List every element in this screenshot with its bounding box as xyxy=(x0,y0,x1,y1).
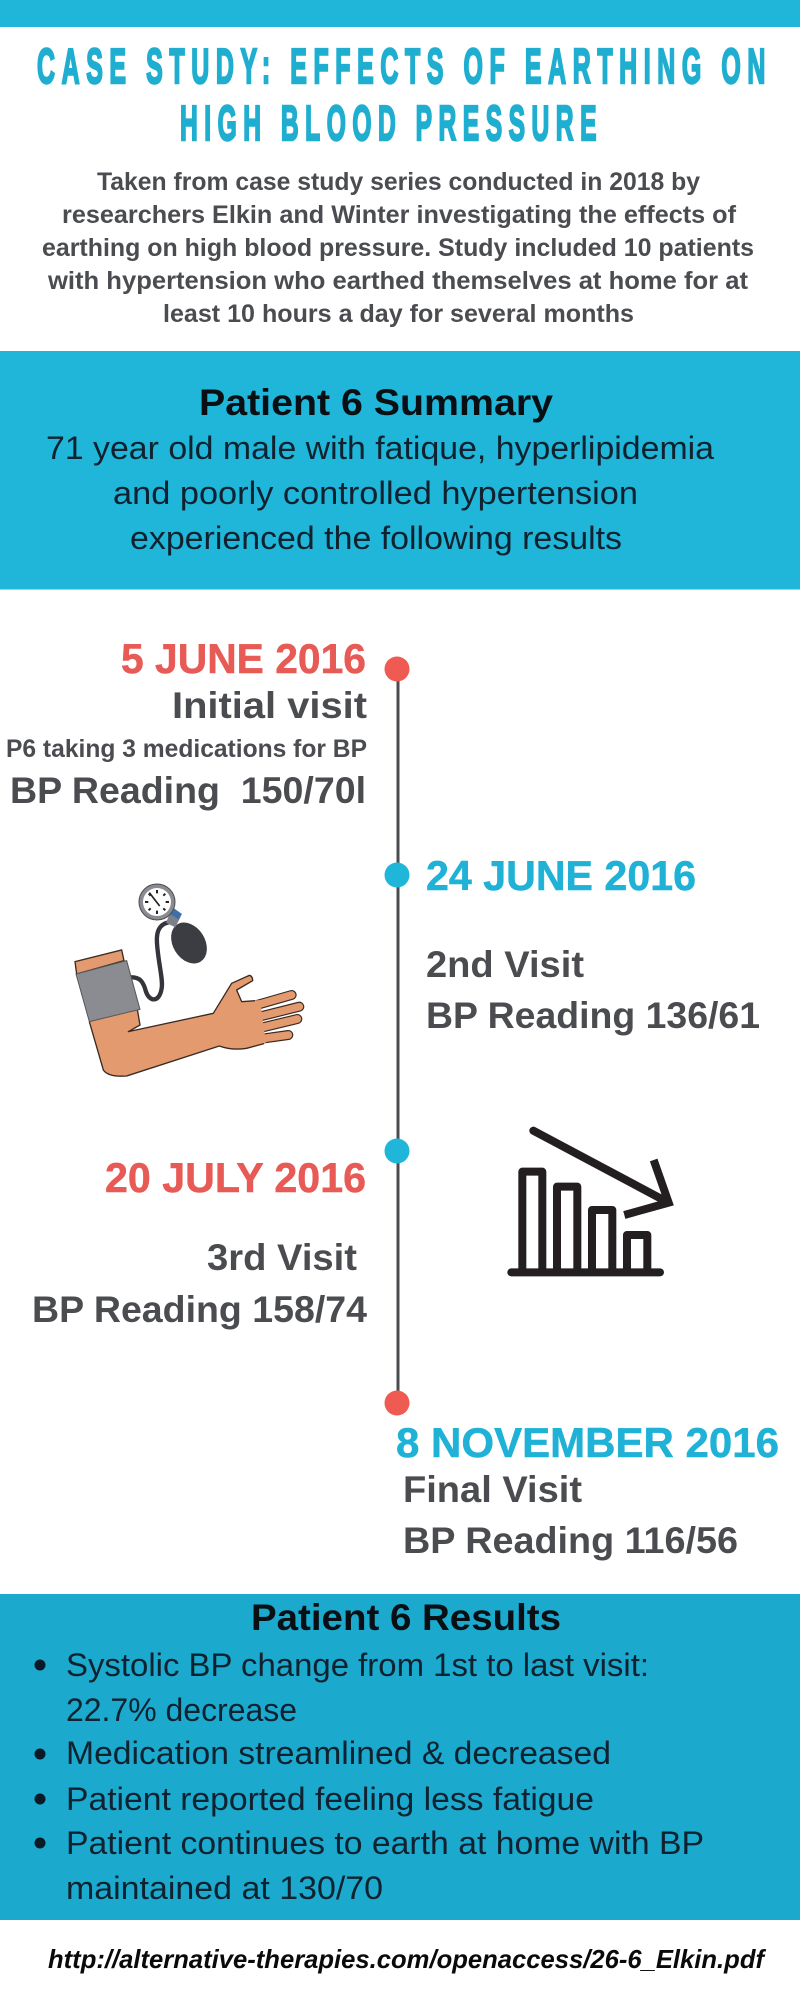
bars xyxy=(522,1172,647,1272)
source link text: http://alternative-therapies.com/openaccess/26-6_Elkin.pdf xyxy=(48,1944,766,1974)
visit: 20 July 2016: 3rd Visit xyxy=(207,1237,357,1278)
heading: patient 6 results: Patient 6 Results xyxy=(251,1597,561,1638)
panel: patient summary xyxy=(0,351,800,590)
results list: Patient continues to earth at home with BP xyxy=(66,1825,704,1861)
bulb xyxy=(164,916,214,970)
visit: 20 July 2016: 20 JULY 2016 xyxy=(105,1154,366,1201)
summary text: experienced the following results xyxy=(130,520,622,556)
summary text: 71 year old male with fatique, hyperlipidemia xyxy=(46,430,714,466)
visit: 5 June 2016: 5 JUNE 2016 xyxy=(121,635,366,682)
results list: Patient reported feeling less fatigue xyxy=(66,1781,594,1817)
visit: 8 November 2016: Final Visit xyxy=(403,1469,582,1510)
visit: 24 June 2016: 24 JUNE 2016 xyxy=(426,852,696,899)
intro text block: earthing on high blood pressure. Study included 10 patients xyxy=(42,234,754,262)
results list: maintained at 130/70 xyxy=(66,1870,383,1906)
dot: 5 June xyxy=(384,656,410,682)
visit: 5 June 2016 xyxy=(6,635,367,811)
intro text block: with hypertension who earthed themselves at home for at xyxy=(47,267,749,295)
dot: 20 July xyxy=(384,1138,410,1164)
visit: 5 June 2016: BP Reading 150/70l xyxy=(10,770,366,811)
results list: Medication streamlined & decreased xyxy=(66,1735,611,1771)
results list xyxy=(34,1647,704,1906)
baseline xyxy=(511,1260,660,1284)
top banner xyxy=(0,0,800,27)
intro text block: least 10 hours a day for several months xyxy=(163,300,634,328)
summary text: and poorly controlled hypertension xyxy=(113,475,638,511)
cuff xyxy=(76,961,140,1022)
upper arm strip xyxy=(75,950,124,974)
icon: arm with blood pressure cuff xyxy=(75,884,299,1076)
fingers xyxy=(253,995,299,1039)
intro text block: Taken from case study series conducted in 2018 by xyxy=(97,168,700,196)
results list: 22.7% decrease xyxy=(66,1692,297,1728)
arrow xyxy=(533,1131,669,1215)
tube xyxy=(130,922,175,999)
dot: 24 June xyxy=(384,862,410,888)
icon: declining bar chart with arrow xyxy=(511,1131,669,1272)
visit: 20 July 2016 xyxy=(32,1154,367,1330)
visit: 5 June 2016: P6 taking 3 medications for BP xyxy=(6,735,367,763)
intro text block: researchers Elkin and Winter investigating the effects of xyxy=(62,201,737,229)
visit: 24 June 2016: 2nd Visit xyxy=(426,944,584,985)
visit: 24 June 2016: BP Reading 136/61 xyxy=(426,995,760,1036)
arm outline xyxy=(89,975,264,1076)
visit: 8 November 2016 xyxy=(396,1419,779,1561)
intro text block xyxy=(42,168,754,328)
visit: 20 July 2016: BP Reading 158/74 xyxy=(32,1289,367,1330)
visit: 5 June 2016: Initial visit xyxy=(172,685,367,726)
results list: Systolic BP change from 1st to last visit: xyxy=(66,1647,649,1683)
visit: 24 June 2016 xyxy=(426,852,760,1036)
visit: 8 November 2016: 8 NOVEMBER 2016 xyxy=(396,1419,779,1466)
summary text xyxy=(46,430,714,556)
visit: 8 November 2016: BP Reading 116/56 xyxy=(403,1520,738,1561)
heading: patient 6 summary: Patient 6 Summary xyxy=(199,382,553,423)
dot: 8 November xyxy=(384,1390,410,1416)
title xyxy=(37,40,772,151)
arm and palm xyxy=(89,975,266,1076)
connector xyxy=(166,912,181,927)
gauge xyxy=(139,884,175,920)
timeline xyxy=(384,656,410,1416)
panel: patient results xyxy=(0,1594,800,1920)
